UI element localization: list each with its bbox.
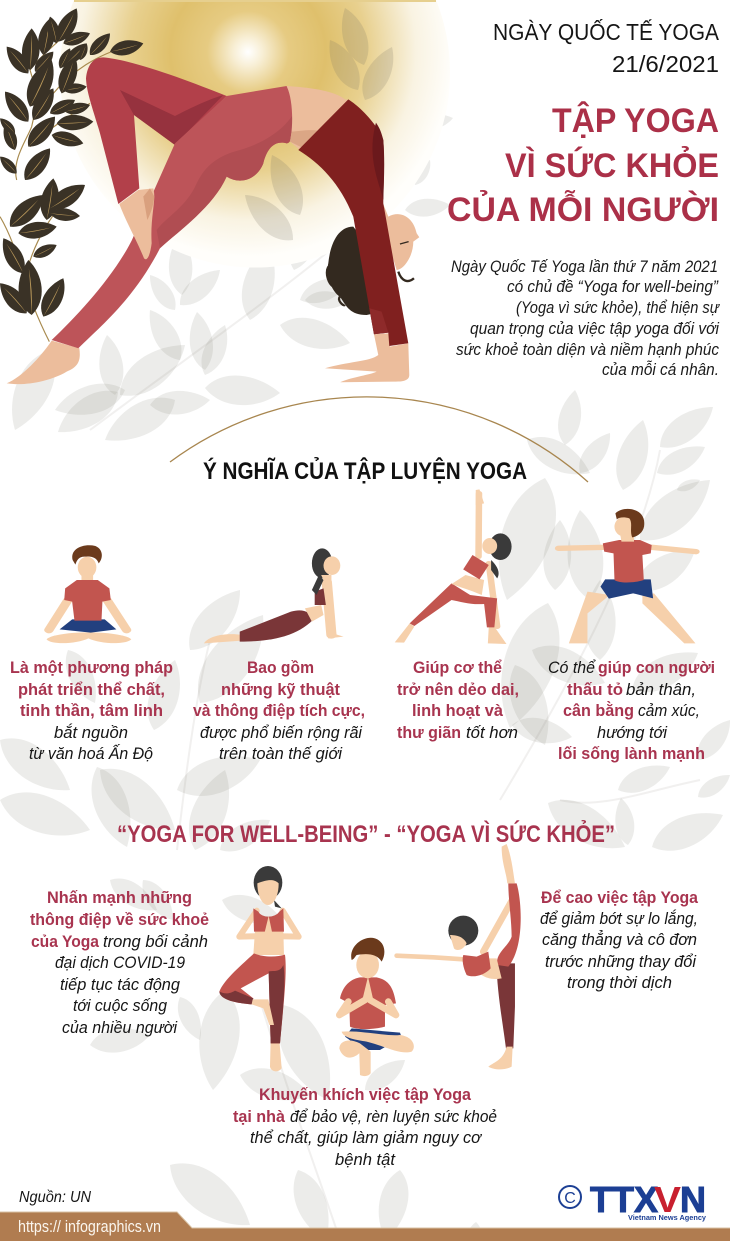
column 1 text: tinh thần, tâm linh xyxy=(20,702,163,720)
footer band: https:// infographics.vn xyxy=(18,1217,161,1236)
intro paragraph: của mỗi cá nhân. xyxy=(602,360,719,379)
column 2 text: được phổ biến rộng rãi xyxy=(200,724,363,742)
sun glow xyxy=(60,0,450,268)
midriff xyxy=(287,86,350,150)
figure: seated prayer man xyxy=(339,938,414,1076)
column 4 text: lối sống lành mạnh xyxy=(558,745,705,763)
midriff shadow xyxy=(290,130,318,147)
figure: triangle pose woman xyxy=(395,489,512,644)
right text block: trong thời dịch xyxy=(567,974,672,992)
column 1 text: bắt nguồn xyxy=(54,723,128,742)
column 1 text xyxy=(10,659,173,763)
right text block: để giảm bớt sự lo lắng, xyxy=(540,909,698,928)
header line: date xyxy=(493,18,719,77)
front leg shading xyxy=(157,115,293,248)
right text block: căng thẳng và cô đơn xyxy=(542,930,697,949)
hair curls xyxy=(327,267,414,305)
column 4 text: thấu tỏ xyxy=(567,681,623,699)
column 2 text xyxy=(193,659,365,763)
figure: seated meditation man xyxy=(47,545,131,643)
footer band xyxy=(0,1212,730,1241)
column 4 text: giúp con người xyxy=(598,659,715,677)
bottom text block: tại nhà xyxy=(233,1108,286,1126)
decorative arc xyxy=(170,397,588,482)
bottom text block: bệnh tật xyxy=(335,1151,396,1169)
column 2 text: Bao gồm xyxy=(247,659,314,677)
left text block: tiếp tục tác động xyxy=(60,976,181,994)
hand-side hands xyxy=(325,333,409,382)
inner arm xyxy=(369,308,388,334)
raised foot xyxy=(119,188,154,259)
intro paragraph xyxy=(451,258,720,379)
section heading: meaning: Ý NGHĨA CỦA TẬP LUYỆN YOGA xyxy=(203,456,527,485)
left text block: đại dịch COVID-19 xyxy=(55,954,185,972)
left text block: của Yoga xyxy=(31,933,100,951)
upper leg xyxy=(86,57,227,204)
figure: cobra pose woman xyxy=(204,548,344,643)
logo: TTXVN: V xyxy=(654,1179,681,1220)
column 3 text: trở nên dẻo dai, xyxy=(397,681,519,699)
left text block: tới cuộc sống xyxy=(73,997,168,1015)
column 2 text: và thông điệp tích cực, xyxy=(193,702,365,720)
faint leaves over sun xyxy=(236,4,402,249)
left text block: Nhấn mạnh những xyxy=(47,889,192,907)
column 3 text: Giúp cơ thể xyxy=(413,659,502,677)
left text block: của nhiều người xyxy=(62,1019,178,1037)
column 2 text: những kỹ thuật xyxy=(221,681,340,699)
figure: tree pose woman xyxy=(219,866,299,1071)
section heading: yoga for well-being: “YOGA FOR WELL-BEING” - “YOGA VÌ SỨC KHỎE” xyxy=(117,819,615,848)
bottom text block xyxy=(233,1086,497,1169)
figure: standing bow pose woman xyxy=(397,844,521,1069)
column 2 text: trên toàn thế giới xyxy=(219,745,343,763)
column 3 text: linh hoạt và xyxy=(412,702,504,720)
figure: warrior pose man xyxy=(559,509,696,643)
right text block: Để cao việc tập Yoga xyxy=(541,889,699,907)
back foot xyxy=(7,341,80,384)
column 4 text: bản thân, xyxy=(626,681,696,699)
front leg xyxy=(52,86,293,348)
hair xyxy=(328,227,383,315)
left text block xyxy=(30,889,209,1037)
column 3 text: tốt hơn xyxy=(466,724,518,742)
dark olive branch xyxy=(0,4,145,342)
header line: date: 21/6/2021 xyxy=(612,51,719,77)
source: Nguồn: UN xyxy=(19,1189,91,1206)
bottom text block: Khuyến khích việc tập Yoga xyxy=(259,1086,472,1104)
column 1 text: phát triển thể chất, xyxy=(18,681,165,699)
logo: TTXVN: N xyxy=(680,1179,706,1220)
main title: CỦA MỖI NGƯỜI xyxy=(447,191,719,229)
logo: TTXVN: C xyxy=(564,1190,576,1207)
column 4 text: cân bằng xyxy=(563,701,634,720)
intro paragraph: có chủ đề “Yoga for well-being” xyxy=(507,278,719,296)
column 4 text: hướng tới xyxy=(597,724,668,742)
bottom text block: thể chất, giúp làm giảm nguy cơ xyxy=(250,1129,483,1147)
logo: TTXVN xyxy=(559,1179,707,1222)
right text block: trước những thay đổi xyxy=(545,953,697,971)
column 3 text: thư giãn xyxy=(397,724,461,742)
neck and head xyxy=(382,200,419,270)
burgundy top xyxy=(298,99,408,346)
column 4 text xyxy=(548,659,715,763)
bottom text block: để bảo vệ, rèn luyện sức khoẻ xyxy=(290,1108,497,1126)
left text block: thông điệp về sức khoẻ xyxy=(30,911,209,929)
left text block: trong bối cảnh xyxy=(103,933,208,951)
column 4 text: Có thể xyxy=(548,659,596,677)
main title xyxy=(447,102,719,229)
main title: VÌ SỨC KHỎE xyxy=(505,147,719,185)
right text block xyxy=(540,889,699,992)
heel shadow xyxy=(143,188,154,220)
logo: TTXVN: TTX xyxy=(590,1179,658,1220)
top shading xyxy=(372,123,384,200)
column 1 text: từ văn hoá Ấn Độ xyxy=(29,744,153,763)
column 4 text: cảm xúc, xyxy=(638,702,700,720)
main title: TẬP YOGA xyxy=(552,102,719,140)
intro paragraph: quan trọng của việc tập yoga đối với xyxy=(470,320,720,338)
column 1 text: Là một phương pháp xyxy=(10,659,173,677)
column 3 text xyxy=(397,659,519,742)
upper leg shadow xyxy=(120,90,223,145)
eye xyxy=(400,242,409,244)
hero illustration: woman in backbend yoga pose xyxy=(7,57,419,384)
logo: TTXVN: Vietnam News Agency xyxy=(628,1213,707,1222)
